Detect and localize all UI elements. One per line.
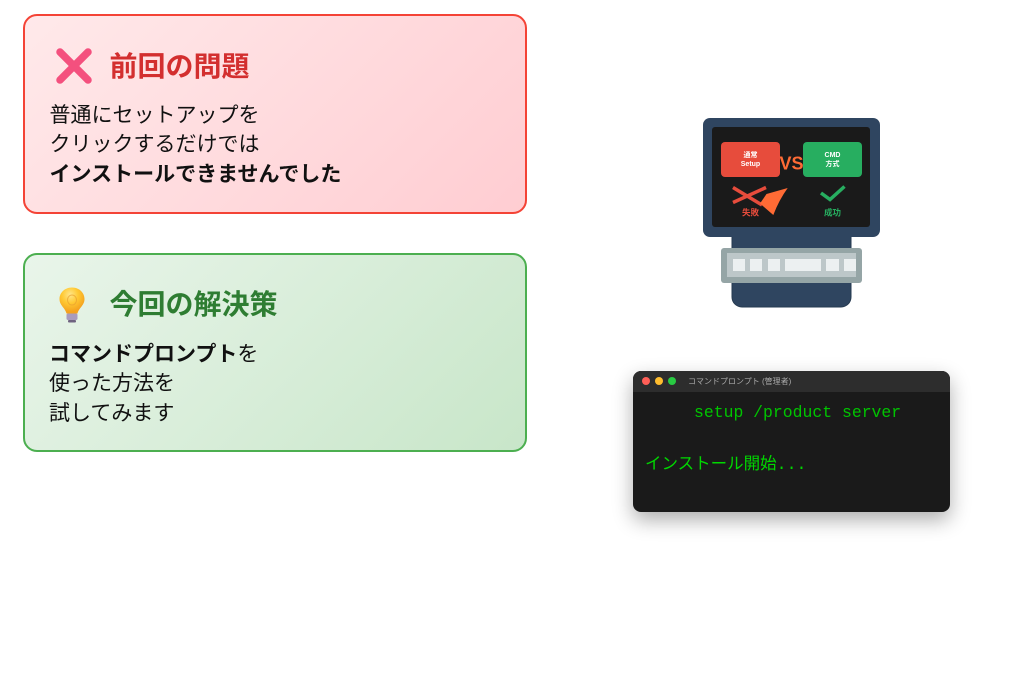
monitor body — [703, 118, 880, 237]
panel: previous problem — [23, 14, 527, 214]
green box: CMD method: 方式 — [826, 159, 840, 168]
text: solution description: 試してみます — [49, 402, 174, 425]
red box: normal setup — [721, 142, 780, 177]
window button: close — [642, 377, 650, 385]
label: failure: 失敗 — [742, 208, 759, 218]
terminal title bar — [633, 371, 950, 392]
keyboard — [721, 248, 862, 283]
terminal command: setup /product server — [694, 403, 901, 422]
window button: minimize — [655, 377, 663, 385]
terminal output: インストール開始... — [645, 455, 806, 474]
heading: current solution: 今回の解決策 — [110, 289, 278, 320]
icon: light bulb — [60, 288, 84, 322]
panel: current solution — [23, 253, 527, 452]
green box: CMD method — [803, 142, 862, 177]
illustration: monitor comparing setup and CMD — [703, 118, 880, 308]
terminal window — [633, 371, 950, 512]
text: problem description: 普通にセットアップを — [50, 104, 260, 127]
icon: cross mark — [56, 48, 92, 84]
monitor screen — [712, 127, 870, 227]
text: solution description: 使った方法を — [49, 372, 175, 395]
heading: previous problem: 前回の問題 — [110, 51, 250, 82]
VS label: VS — [779, 154, 804, 174]
terminal title: コマンドプロンプト (管理者) — [688, 377, 791, 386]
text: problem description: インストールできませんでした — [50, 163, 341, 186]
icon: failure cross with orange mark — [733, 188, 788, 215]
label: success: 成功 — [824, 208, 841, 218]
red box: normal setup: 通常 — [744, 150, 758, 159]
window button: maximize — [668, 377, 676, 385]
green box: CMD method: CMD — [825, 152, 840, 159]
icon: success check — [821, 186, 844, 200]
monitor stand — [732, 230, 851, 307]
text: solution description: コマンドプロンプトを — [49, 343, 258, 366]
text: problem description — [50, 104, 341, 186]
red box: normal setup: Setup — [741, 161, 760, 168]
text: solution description — [49, 342, 258, 425]
text: problem description: クリックするだけでは — [50, 133, 260, 156]
